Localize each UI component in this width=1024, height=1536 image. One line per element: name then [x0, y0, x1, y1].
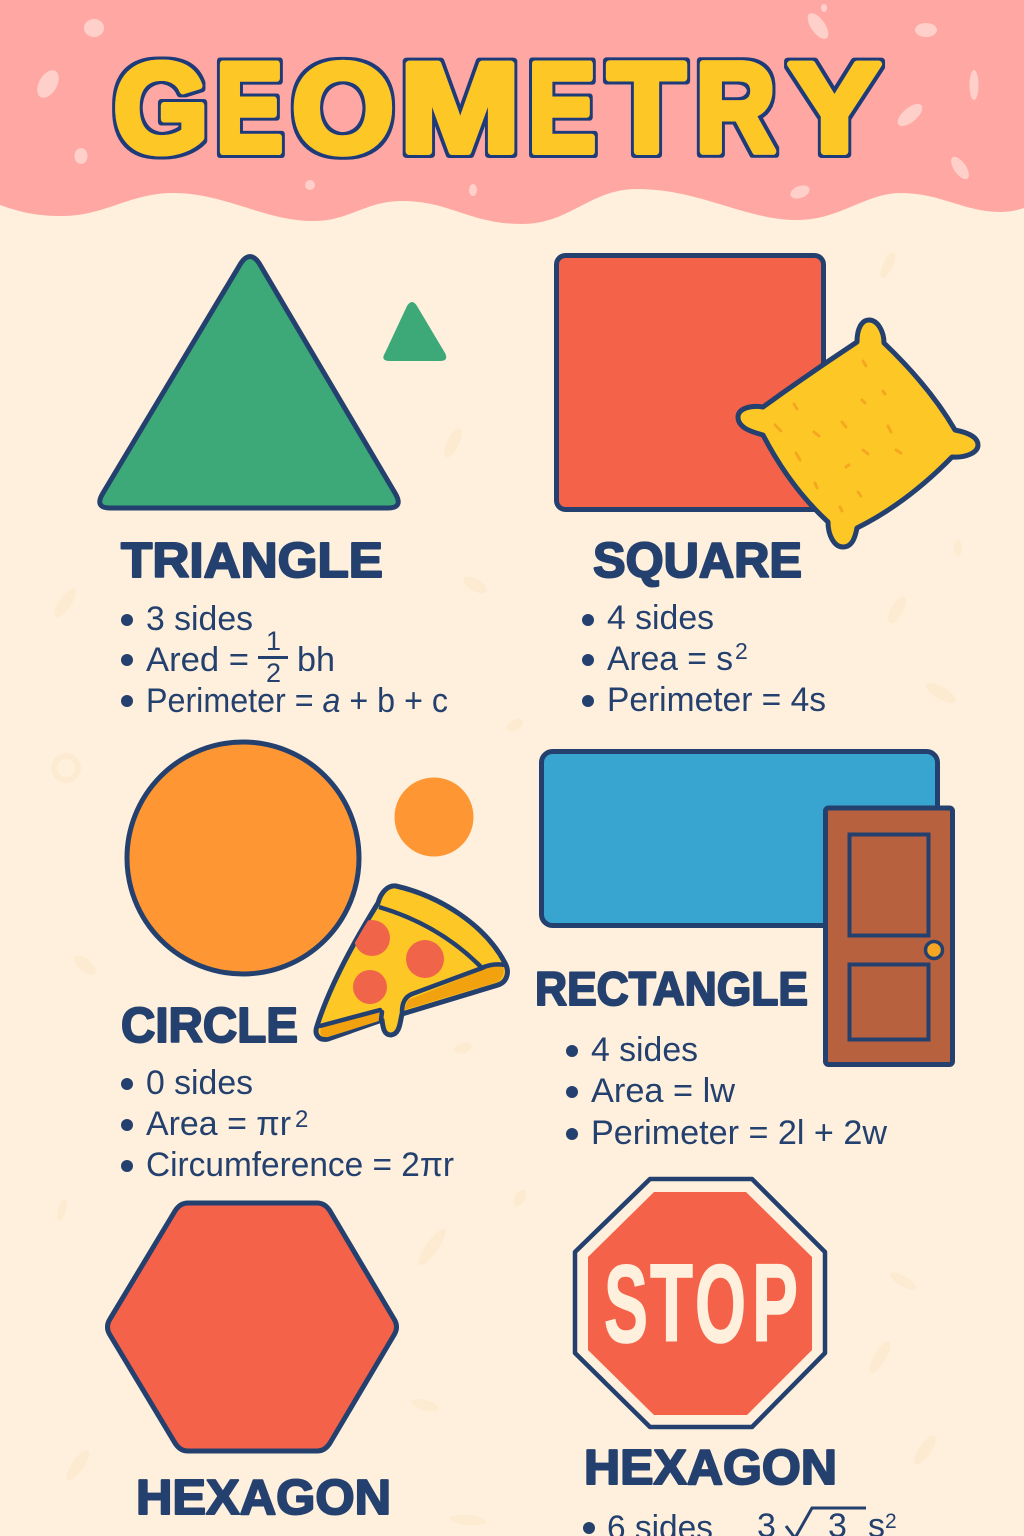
heading: rectangle: RECTANGLE — [535, 962, 808, 1015]
text: rectangle facts — [566, 1031, 887, 1152]
icon: large green triangle — [100, 256, 398, 508]
text: square facts: Area = s — [607, 640, 733, 678]
icon: stop sign — [575, 1179, 825, 1427]
heading: hexagon left: HEXAGON — [136, 1471, 391, 1525]
icon: red hexagon — [108, 1203, 396, 1451]
text: square facts: 2 — [735, 638, 748, 664]
icon: small green triangle — [383, 302, 446, 361]
title: T — [608, 36, 685, 178]
text: square facts — [582, 599, 826, 719]
heading: circle: CIRCLE — [121, 999, 298, 1053]
text: circle facts: 2 — [295, 1106, 308, 1133]
panel: hexagon left — [108, 1203, 396, 1525]
heading: triangle: TRIANGLE — [121, 534, 383, 588]
icon: red square — [556, 256, 824, 510]
icon: pizza slice — [316, 886, 507, 1039]
text: rectangle facts: Perimeter = 2l + 2w — [591, 1114, 887, 1152]
text: hexagon facts — [583, 1507, 897, 1536]
title: M — [400, 36, 520, 178]
title: E — [528, 36, 596, 178]
panel: square — [556, 256, 978, 719]
title: E — [216, 36, 283, 178]
text: circle facts: Circumference = 2πr — [146, 1146, 454, 1184]
panel: rectangle — [535, 752, 952, 1152]
icon: stop sign: T — [650, 1242, 693, 1365]
title: O — [292, 37, 394, 179]
heading: hexagon right: HEXAGON — [584, 1441, 837, 1495]
text: rectangle facts: Area = lw — [591, 1072, 735, 1110]
panel: circle — [121, 742, 507, 1184]
header banner — [0, 0, 1024, 224]
heading: square: SQUARE — [593, 534, 802, 588]
text: triangle facts: Ared = — [146, 641, 249, 679]
text: square facts: Perimeter = 4s — [607, 681, 826, 719]
text: triangle facts: 2 — [266, 658, 281, 688]
panel: stop sign — [575, 1179, 897, 1536]
icon: yellow pillow — [738, 320, 978, 547]
icon: stop sign: S — [604, 1243, 648, 1366]
title — [114, 36, 880, 179]
text: circle facts: Area = πr — [146, 1105, 291, 1143]
title: R — [696, 36, 776, 178]
text: triangle facts: bh — [297, 641, 335, 679]
icon: stop sign: P — [752, 1242, 798, 1365]
text: rectangle facts: 4 sides — [591, 1031, 698, 1069]
title: G — [114, 37, 208, 179]
text: triangle facts: 1 — [266, 626, 281, 656]
text: triangle facts: Perimeter = a + b + c — [146, 682, 448, 720]
text: square facts: 4 sides — [607, 599, 714, 637]
text: triangle facts — [121, 600, 448, 720]
icon: brown door — [826, 808, 952, 1064]
icon: small orange circle — [394, 778, 474, 856]
icon: large orange circle — [127, 742, 359, 974]
icon: blue rectangle — [542, 752, 938, 926]
text: triangle facts: 3 sides — [146, 600, 253, 638]
text: circle facts: 0 sides — [146, 1064, 253, 1102]
title: Y — [788, 36, 880, 178]
text: hexagon facts: 2 — [885, 1510, 897, 1533]
panel: triangle — [100, 256, 448, 720]
text: circle facts — [121, 1064, 454, 1184]
icon: stop sign: O — [695, 1243, 746, 1366]
